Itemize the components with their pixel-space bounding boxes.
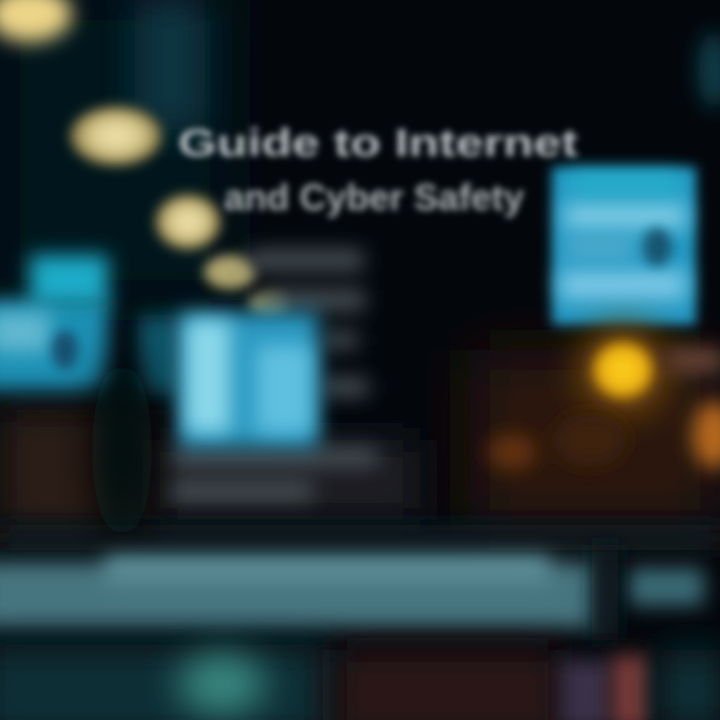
panel: left blue sign (0, 255, 108, 390)
lights: orange bokeh (488, 348, 720, 470)
street lamp: middle (155, 194, 221, 250)
title: blurred heading (178, 122, 578, 218)
light: top right teal glow (698, 32, 720, 108)
title: blurred heading: and Cyber Safety (224, 177, 524, 218)
street lamp: upper (70, 106, 162, 166)
text block: blurred body copy (168, 250, 378, 500)
title: blurred heading: Guide to Internet (178, 122, 578, 165)
street lamps: small row (204, 255, 288, 316)
road: reflections (0, 645, 720, 720)
figure: dark silhouette (92, 360, 152, 540)
street lamp: top left (0, 0, 72, 42)
crosswalk: light band (0, 545, 704, 640)
panel: centre blue sign (138, 312, 318, 447)
light: amber lamp (579, 326, 667, 414)
panel: right blue sign (552, 167, 696, 325)
